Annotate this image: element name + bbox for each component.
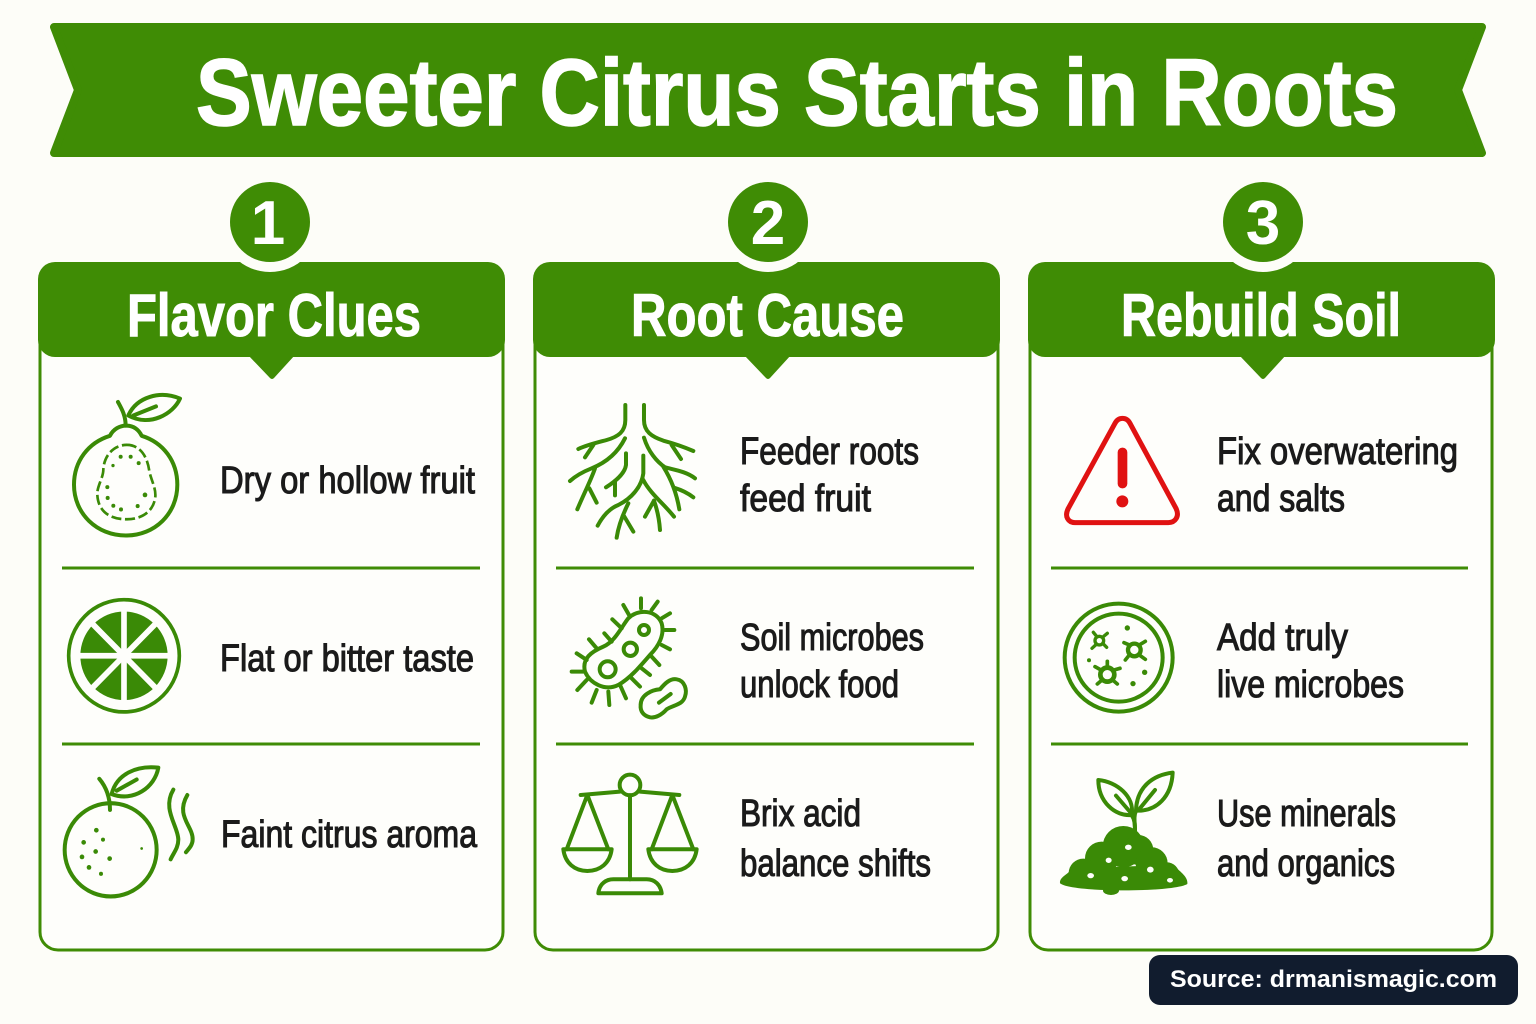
icon: citrus slice [69, 600, 179, 712]
text: use minerals and organics [1217, 793, 1396, 885]
text: use minerals and organics: Use minerals [1217, 793, 1396, 835]
icon: soil microbes [572, 598, 686, 717]
panel header: Rebuild Soil [1121, 282, 1401, 349]
panel header [1028, 172, 1495, 379]
icon: orange with aroma [65, 767, 193, 896]
text: brix acid balance shifts [740, 793, 931, 885]
panel header: Flavor Clues [127, 282, 421, 349]
text: fix overwatering and salts: and salts [1217, 478, 1345, 520]
panel: Rebuild Soil [1028, 172, 1495, 950]
panel header [533, 172, 1000, 379]
text: fix overwatering and salts [1217, 431, 1458, 520]
icon: balance scale [563, 775, 697, 893]
text: dry or hollow fruit: Dry or hollow fruit [220, 460, 475, 502]
text: use minerals and organics: and organics [1217, 843, 1395, 885]
icon: hollow fruit [74, 395, 180, 535]
panel header: 3 [1246, 189, 1280, 258]
panel: Flavor Clues [38, 172, 505, 950]
text: brix acid balance shifts: balance shifts [740, 843, 931, 885]
text: flat or bitter taste: Flat or bitter taste [220, 638, 474, 680]
icon: petri dish microbes [1065, 604, 1173, 712]
panel header: 1 [251, 189, 285, 258]
panel header [38, 172, 505, 379]
icon: roots [570, 405, 695, 538]
panel header: 2 [751, 189, 785, 258]
text: soil microbes unlock food [740, 617, 924, 706]
source badge [1149, 955, 1518, 1005]
text: feeder roots feed fruit: Feeder roots [740, 431, 919, 473]
title banner: Sweeter Citrus Starts in Roots [196, 40, 1398, 146]
text: soil microbes unlock food: Soil microbes [740, 617, 924, 659]
icon: sprout in soil [1060, 773, 1187, 895]
text: add truly live microbes: live microbes [1217, 664, 1404, 706]
text: soil microbes unlock food: unlock food [740, 664, 899, 706]
icon: warning triangle [1067, 418, 1177, 523]
text: fix overwatering and salts: Fix overwatering [1217, 431, 1458, 473]
panel: Root Cause [533, 172, 1000, 950]
text: brix acid balance shifts: Brix acid [740, 793, 861, 835]
source badge: Source: drmanismagic.com [1170, 966, 1497, 993]
text: add truly live microbes: Add truly [1217, 617, 1348, 659]
text: add truly live microbes [1217, 617, 1404, 706]
text: faint citrus aroma: Faint citrus aroma [221, 814, 478, 856]
panel header: Root Cause [631, 282, 904, 349]
text: feeder roots feed fruit: feed fruit [740, 478, 871, 520]
text: feeder roots feed fruit [740, 431, 919, 520]
